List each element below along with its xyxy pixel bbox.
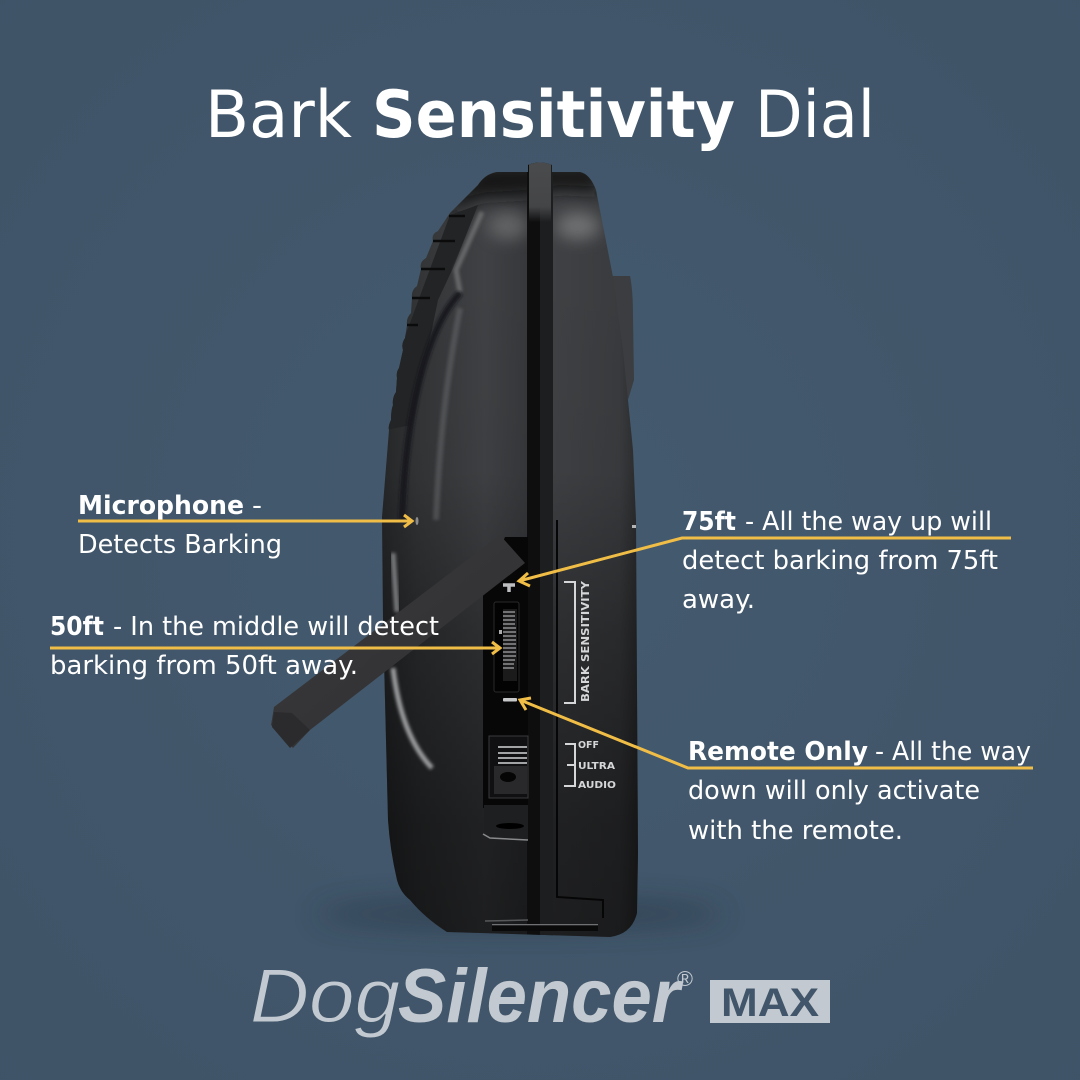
callout: 75ft — [519, 507, 1011, 615]
callout: 75ft: detect barking from 75ft — [682, 546, 998, 576]
callout: 75ft: - All the way up will — [745, 507, 992, 537]
callout: remote only: Remote Only — [688, 737, 868, 767]
logo: DogSilencer MAX: Dog — [250, 954, 400, 1039]
callout: 50ft: - In the middle will detect — [113, 612, 439, 642]
bark sensitivity label: BARK SENSITIVITY — [580, 581, 592, 702]
logo: DogSilencer MAX: Silencer — [398, 954, 684, 1039]
dial wheel — [499, 609, 517, 681]
arrow: 50ft — [50, 642, 500, 654]
arrow: 75ft — [519, 538, 1011, 586]
callout: 50ft — [50, 612, 500, 681]
callout: 75ft: 75ft — [682, 507, 736, 537]
title: Sensitivity — [372, 78, 735, 153]
callout: microphone: Detects Barking — [78, 530, 282, 560]
logo: DogSilencer MAX: ® — [677, 968, 694, 991]
side marker — [632, 525, 636, 528]
mode labels: ULTRA — [578, 761, 616, 772]
device shadow — [315, 899, 725, 929]
mode switch — [489, 736, 528, 798]
title — [205, 78, 875, 153]
device body — [380, 160, 642, 940]
rear knob — [612, 276, 634, 400]
arrow: remote only — [520, 698, 1033, 768]
title: Bark — [205, 78, 352, 153]
callout: remote only: down will only activate — [688, 776, 980, 806]
callout: 50ft: 50ft — [50, 612, 104, 642]
callout: microphone: - — [252, 491, 262, 521]
mode labels: OFF — [578, 740, 599, 751]
microphone hole — [416, 517, 418, 525]
product: DogSilencer device side view — [271, 160, 642, 940]
callout: microphone — [78, 491, 412, 560]
center band — [527, 160, 541, 940]
bark sensitivity label — [564, 581, 592, 703]
mode labels — [564, 740, 616, 791]
plus mark — [503, 585, 515, 592]
dial window — [494, 602, 519, 692]
callout: remote only — [520, 698, 1033, 846]
strap — [271, 535, 525, 748]
minus mark — [503, 698, 517, 702]
callout: remote only: - All the way — [875, 737, 1031, 767]
rib lines — [407, 216, 465, 325]
callout: 75ft: away. — [682, 585, 755, 615]
MAX badge: MAX — [721, 981, 819, 1025]
arrow: microphone — [78, 515, 412, 527]
callout: microphone: Microphone — [78, 491, 244, 521]
logo: DogSilencer MAX — [250, 954, 830, 1039]
mode labels: AUDIO — [578, 780, 616, 791]
callout: remote only: with the remote. — [688, 816, 903, 846]
title: Dial — [755, 78, 875, 153]
callout: 50ft: barking from 50ft away. — [50, 651, 358, 681]
